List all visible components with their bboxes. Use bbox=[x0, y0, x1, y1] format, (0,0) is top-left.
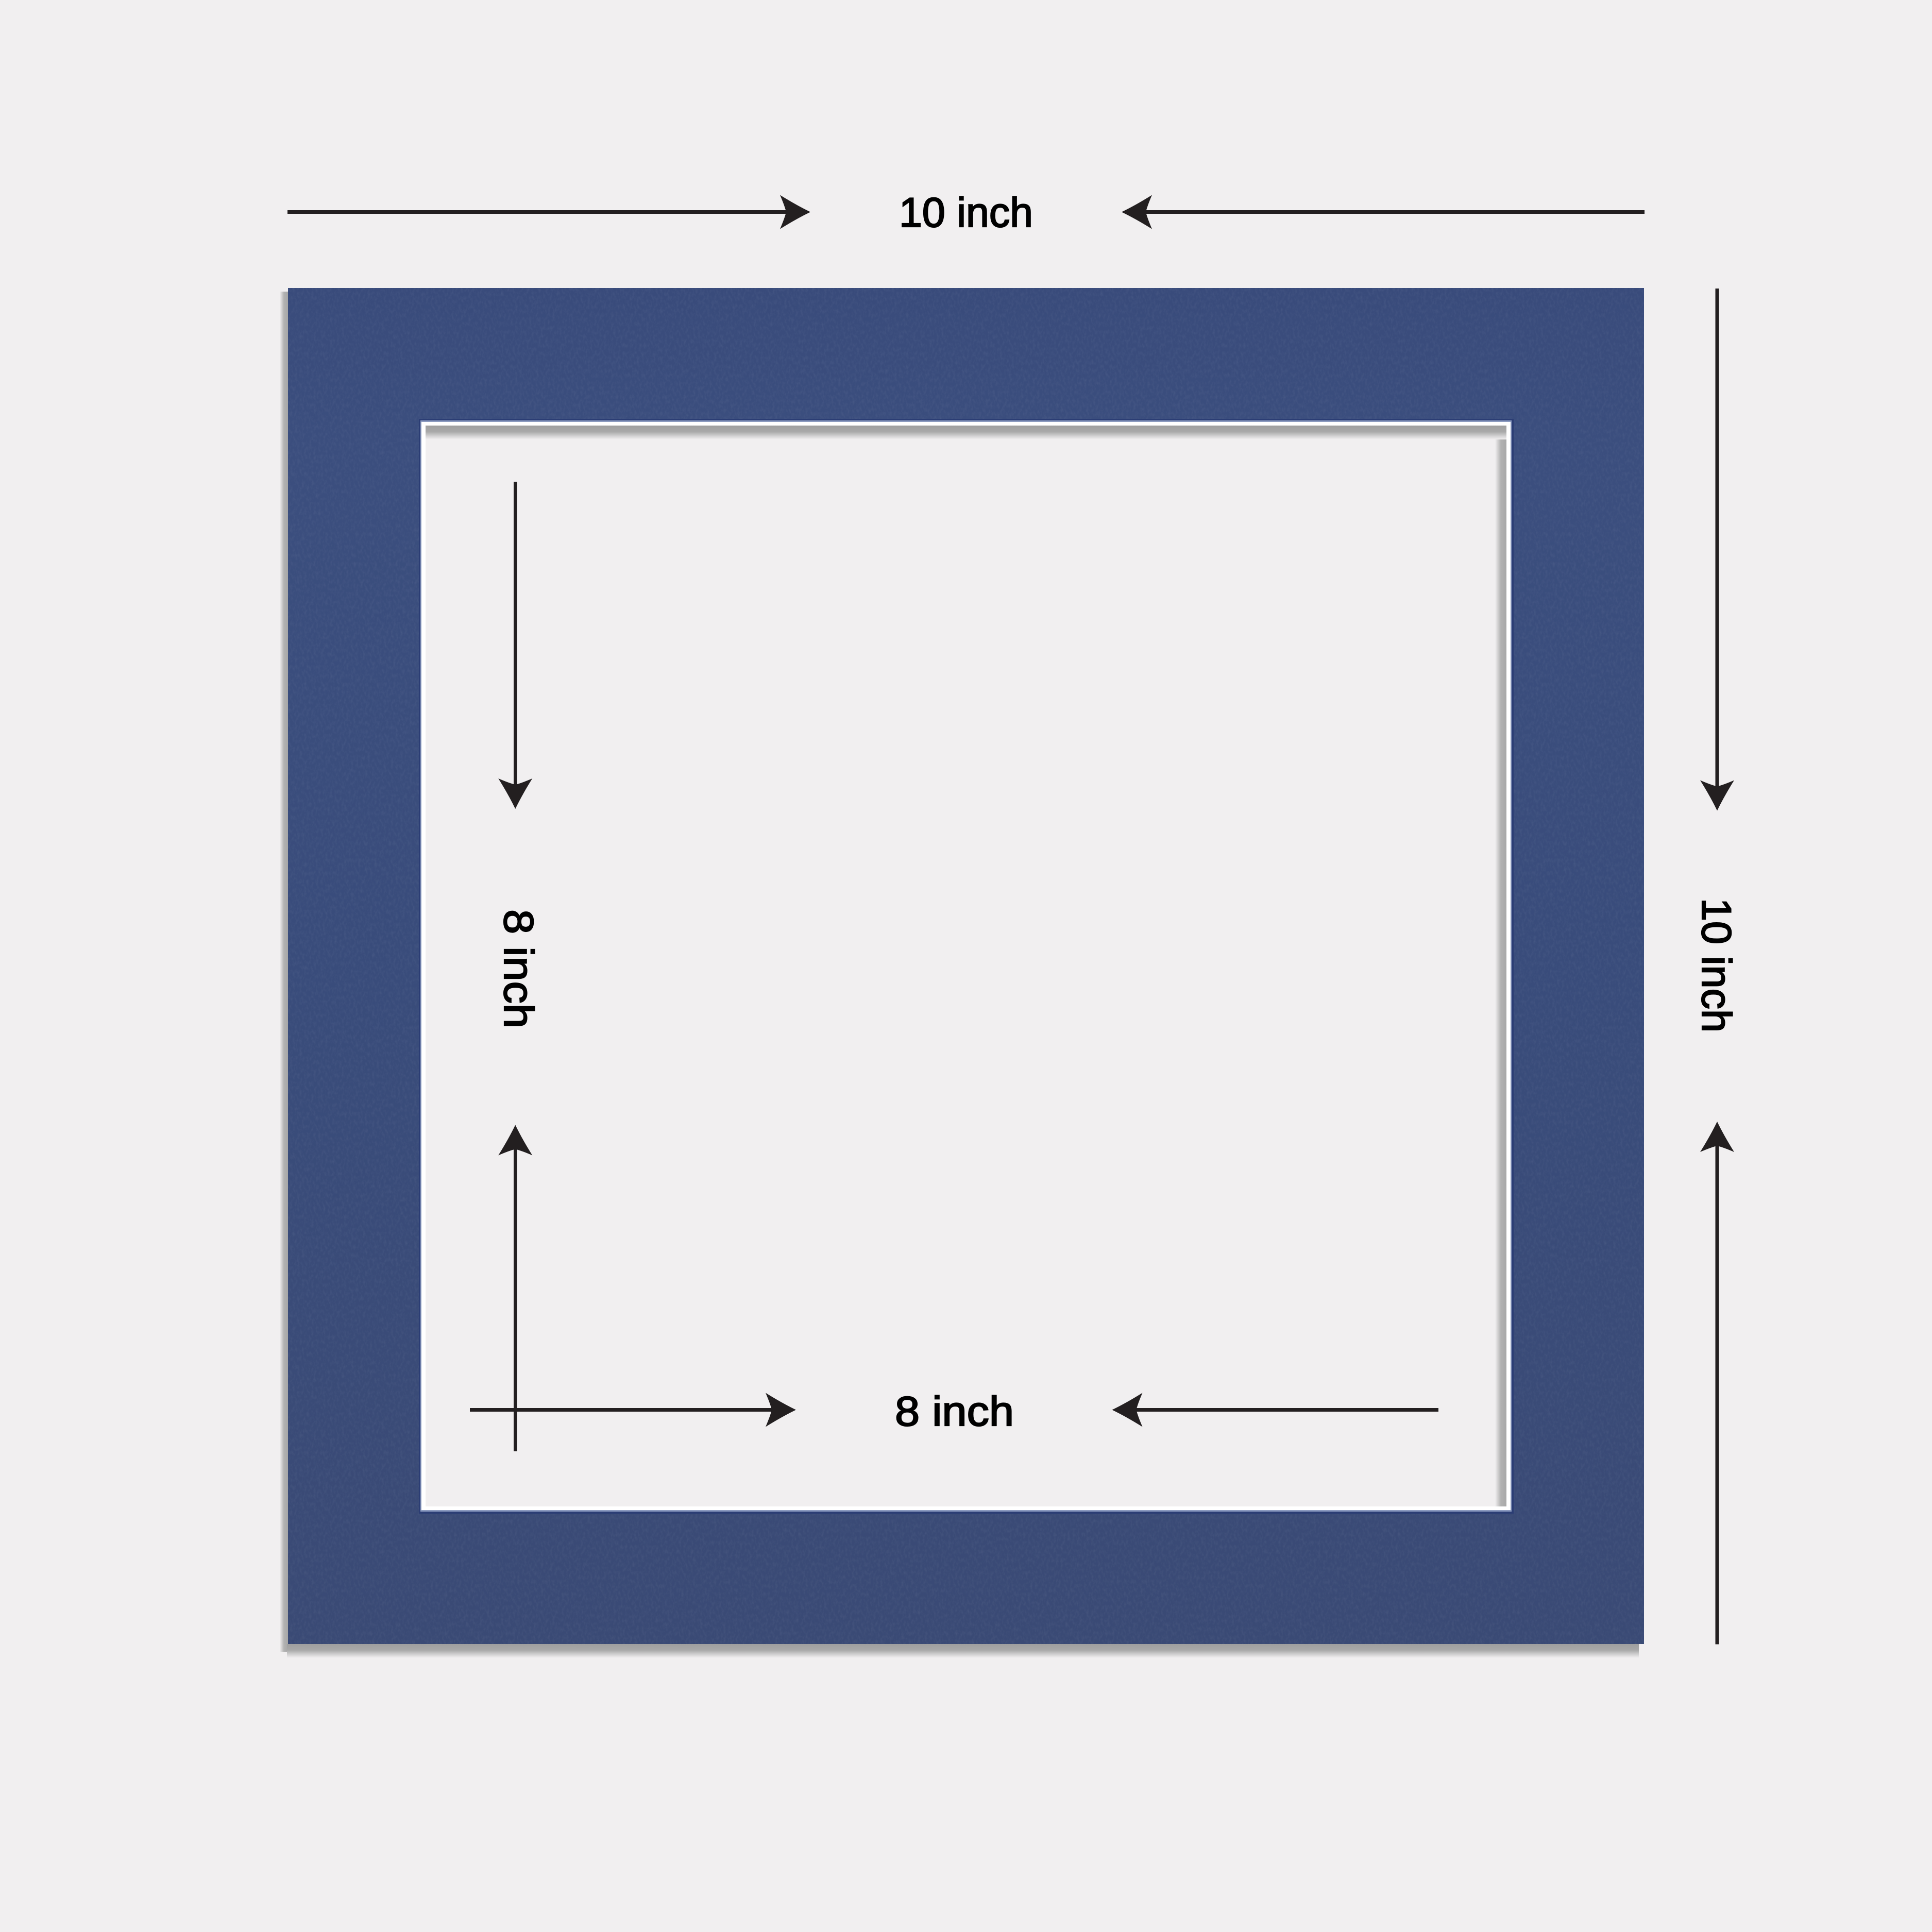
dimension: outer width, left arrow bbox=[287, 195, 810, 229]
mat board bbox=[280, 288, 1644, 1658]
dimension label: 8 inch left: 8 inch bbox=[495, 909, 541, 1028]
dimension: opening height, bottom arrow bbox=[498, 1125, 532, 1451]
mat paper texture bbox=[288, 288, 1644, 1644]
dimension label: 10 inch right: 10 inch bbox=[1693, 898, 1739, 1032]
dimension: outer height, bottom arrow bbox=[1700, 1122, 1734, 1645]
dimension label: 10 inch top: 10 inch bbox=[899, 190, 1033, 236]
opening bevel: dark outline bbox=[419, 419, 1514, 1514]
dimension: outer height, top arrow bbox=[1700, 289, 1734, 811]
opening bevel: white core bbox=[421, 422, 1511, 1510]
opening inner shadow: right bbox=[1495, 426, 1506, 1506]
dimension: opening width, right arrow bbox=[1112, 1393, 1438, 1427]
dimension: outer width, right arrow bbox=[1122, 195, 1645, 229]
dimension: opening height, top arrow bbox=[498, 482, 532, 809]
opening inner shadow: top bbox=[426, 426, 1506, 439]
dimension label: 8 inch bottom: 8 inch bbox=[895, 1388, 1014, 1435]
opening bevel: light blue edge bbox=[420, 420, 1512, 1512]
mat outer shadow: left bbox=[280, 292, 288, 1652]
mat blue border bbox=[288, 288, 1644, 1644]
mat outer shadow: bottom bbox=[287, 1644, 1639, 1658]
dimension: opening width, left arrow bbox=[470, 1393, 796, 1427]
